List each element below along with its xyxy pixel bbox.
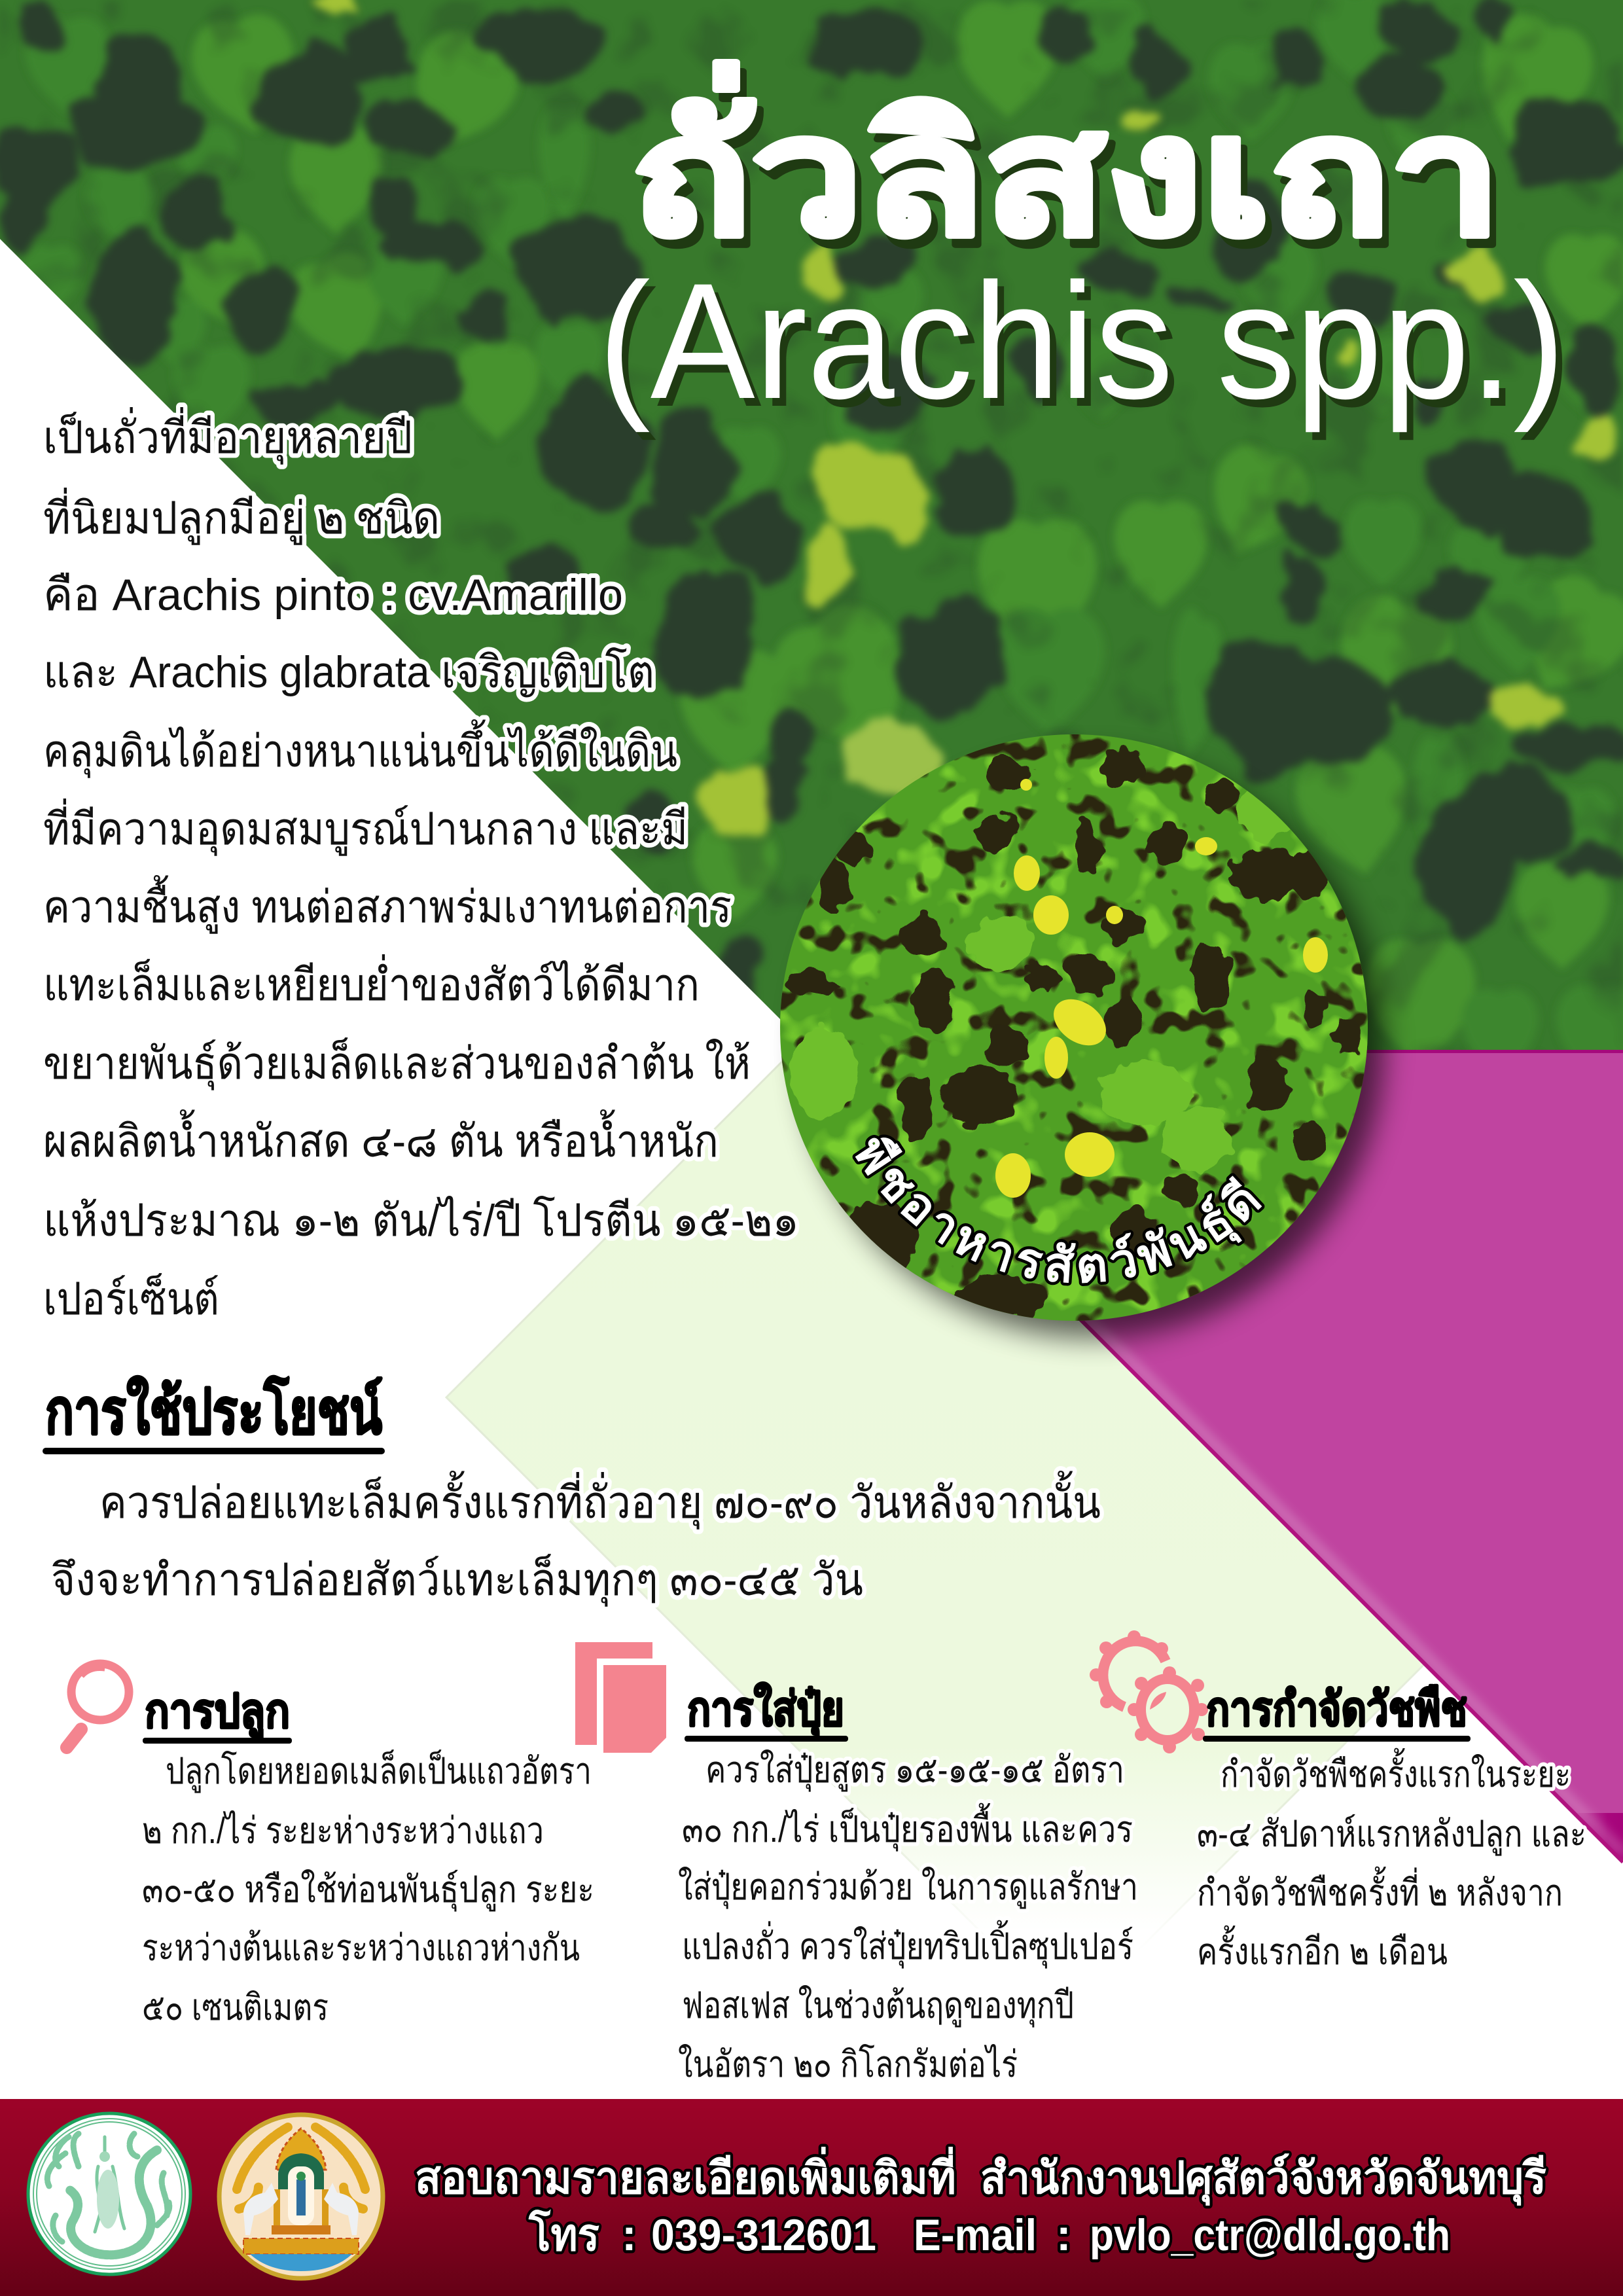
intro paragraph: เป็นถั่วที่มีอายุหลายปี — [43, 407, 412, 465]
panel: planting — [142, 1685, 594, 2028]
intro paragraph: เปอร์เซ็นต์ — [43, 1273, 219, 1324]
circular inset photo with shadow — [780, 734, 1404, 1360]
contact text: สอบถามรายละเอียดเพิ่มเติมที่ — [415, 2146, 956, 2203]
panel: planting: ปลูกโดยหยอดเมล็ดเป็นแถวอัตรา — [166, 1749, 592, 1793]
panel: planting: ๒ กก./ไร่ ระยะห่างระหว่างแถว — [142, 1810, 544, 1851]
logo: green seal — [28, 2113, 190, 2274]
panel: planting: ๓๐-๕๐ หรือใช้ท่อนพันธุ์ปลูก ระยะ — [142, 1869, 594, 1912]
contact text: pvlo_ctr@dld.go.th — [1090, 2210, 1450, 2260]
panel: fertilizing: ในอัตรา ๒๐ กิโลกรัมต่อไร่ — [678, 2043, 1018, 2085]
footer band — [0, 2099, 1623, 2296]
contact text: 039-312601 — [651, 2210, 876, 2260]
subtitle: scientific name: (Arachis spp.) — [598, 249, 1565, 433]
intro paragraph: แห้งประมาณ ๑-๒ ตัน/ไร่/ปี โปรตีน ๑๕-๒๑ — [43, 1195, 799, 1246]
panel: weed control: ครั้งแรกอีก ๒ เดือน — [1197, 1926, 1448, 1972]
intro paragraph: ความชื้นสูง ทนต่อสภาพร่มเงาทนต่อการ — [43, 875, 732, 934]
heading: benefits — [43, 1376, 385, 1454]
panel: fertilizing: ๓๐ กก./ไร่ เป็นปุ๋ยรองพื้น และควร — [682, 1803, 1133, 1852]
contact text — [415, 2146, 1546, 2260]
intro paragraph: และ Arachis glabrata เจริญเติบโต — [43, 647, 654, 697]
intro paragraph: คือ Arachis pinto : cv.Amarillo — [43, 570, 623, 620]
contact text: E-mail — [914, 2210, 1037, 2260]
benefits text: จึงจะทำการปล่อยสัตว์แทะเล็มทุกๆ ๓๐-๔๕ วัน — [51, 1554, 863, 1607]
icon: gears — [1090, 1630, 1208, 1753]
leaves bright — [170, 1, 1623, 1067]
intro paragraph: คลุมดินได้อย่างหนาแน่นขึ้นได้ดีในดิน — [43, 719, 677, 778]
contact text: : — [1056, 2210, 1071, 2260]
heading: benefits: การใช้ประโยชน์ — [45, 1376, 382, 1447]
panel: fertilizing: ควรใส่ปุ๋ยสูตร ๑๕-๑๕-๑๕ อัตรา — [705, 1749, 1124, 1792]
logo: gold provincial seal — [219, 2115, 383, 2278]
panel: weed control: การกำจัดวัชพืช — [1206, 1683, 1467, 1736]
magenta triangular panel — [810, 1042, 1623, 1862]
intro paragraph: ที่นิยมปลูกมีอยู่ ๒ ชนิด — [43, 488, 440, 545]
contact text: : — [622, 2210, 637, 2260]
benefits text: ควรปล่อยแทะเล็มครั้งแรกที่ถั่วอายุ ๗๐-๙๐ วันหลังจากนั้น — [99, 1471, 1101, 1530]
leaves medium — [22, 0, 1623, 1083]
panel: fertilizing: การใส่ปุ๋ย — [687, 1681, 844, 1739]
yellow flowers — [306, 0, 1621, 842]
panel: fertilizing: ฟอสเฟส ในช่วงต้นฤดูของทุกปี — [682, 1984, 1074, 2028]
panel: fertilizing: ใส่ปุ๋ยคอกร่วมด้วย ในการดูแลรักษา — [678, 1866, 1138, 1909]
contact text: สำนักงานปศุสัตว์จังหวัดจันทบุรี — [980, 2153, 1546, 2206]
panel: fertilizing: แปลงถั่ว ควรใส่ปุ๋ยทริปเปิ้ลซุปเปอร์ — [682, 1920, 1133, 1969]
benefits text — [51, 1471, 1101, 1607]
intro paragraph: ที่มีความอุดมสมบูรณ์ปานกลาง และมี — [43, 798, 688, 856]
dark gaps between leaves — [0, 0, 1623, 1014]
pale green diamond background — [446, 1041, 1425, 2020]
contact text: โทร — [528, 2209, 599, 2260]
panel: weed control — [1197, 1683, 1586, 1972]
intro paragraph: แทะเล็มและเหยียบย่ำของสัตว์ได้ดีมาก — [43, 954, 700, 1010]
intro paragraph: ผลผลิตน้ำหนักสด ๔-๘ ตัน หรือน้ำหนัก — [43, 1109, 719, 1166]
photo background: peanut leaves — [0, 0, 1623, 1083]
intro paragraph — [43, 407, 799, 1324]
panel: fertilizing — [678, 1681, 1138, 2085]
panel: planting: ระหว่างต้นและระหว่างแถวห่างกัน — [142, 1927, 580, 1968]
yellow flowers in inset — [995, 779, 1328, 1198]
icon: magnifier — [67, 1664, 129, 1748]
panel: planting: ๕๐ เซนติเมตร — [142, 1986, 329, 2028]
curved caption: พืชอาหารสัตว์พันธุ์ดี — [852, 1135, 1264, 1286]
random dark texture — [0, 0, 1623, 1054]
panel: planting: การปลูก — [145, 1685, 290, 1741]
icon: documents — [575, 1642, 666, 1753]
intro paragraph: ขยายพันธุ์ด้วยเมล็ดและส่วนของลำต้น ให้ — [43, 1037, 751, 1090]
title: ถั่วลิสงเถา — [632, 62, 1501, 268]
